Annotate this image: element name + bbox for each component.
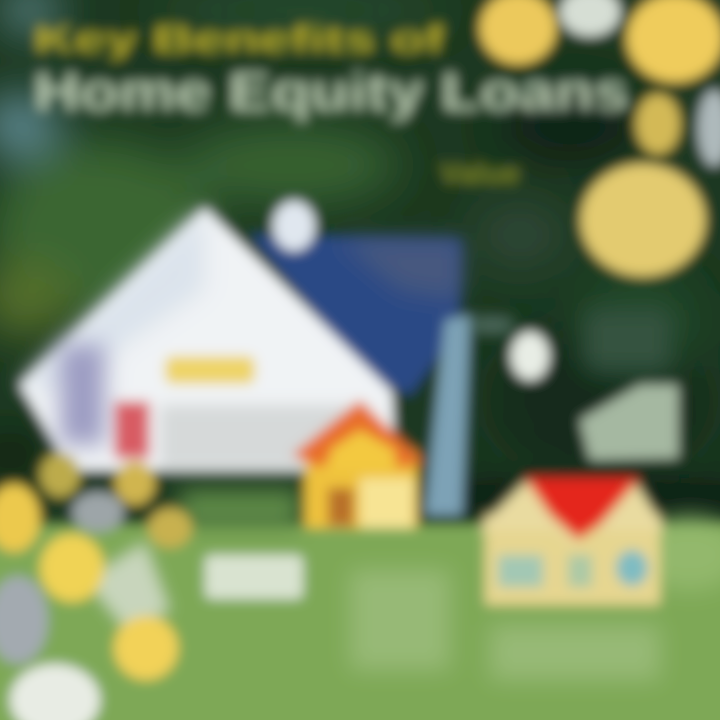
title: top line: Key Benefits of <box>34 19 444 61</box>
subtitle accent: Value <box>440 157 520 190</box>
house: red door <box>115 402 149 458</box>
lawn <box>0 490 720 720</box>
icon: coin stack lower left <box>0 453 192 720</box>
house: window purple <box>60 345 105 445</box>
label: white tag on lawn <box>205 555 303 599</box>
icon: gold coins top right <box>480 0 720 276</box>
house: blue roof <box>250 235 460 395</box>
icon: small orange house <box>292 400 424 528</box>
label: pale lawn text blocks <box>350 570 660 680</box>
house: white gable front <box>20 208 395 470</box>
house: left roof shade <box>20 208 205 390</box>
icon: white dot and chart on dark panel <box>472 310 678 460</box>
icon: red roof cottage <box>478 478 665 605</box>
house: lower wall shade <box>160 405 370 470</box>
house: chimney <box>273 201 315 251</box>
title: second line: Home Equity Loans <box>34 62 629 122</box>
house: side wall <box>425 315 470 515</box>
house: yellow sign <box>165 356 255 384</box>
illustration: main white house <box>20 201 470 515</box>
